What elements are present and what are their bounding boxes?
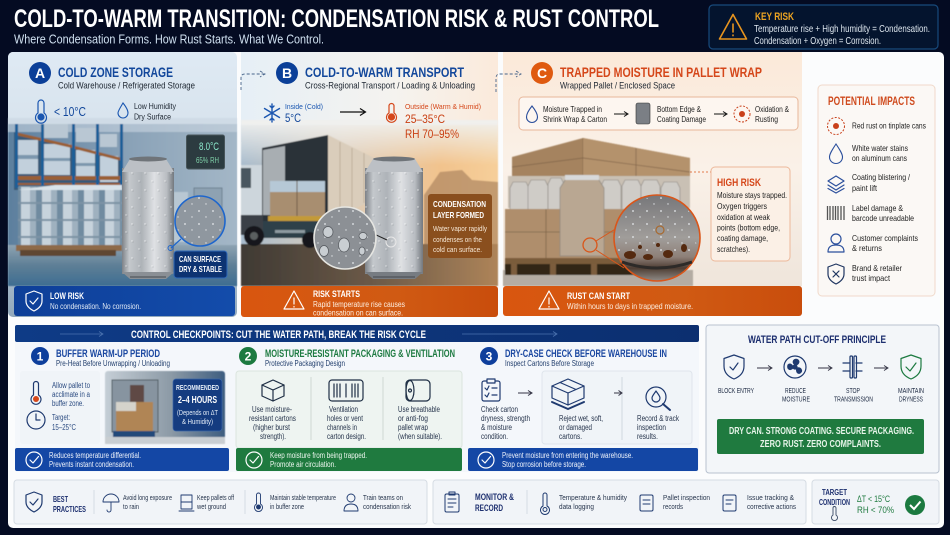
card 2: moisture-resistant packaging: MOISTURE-RESISTANT PACKAGING & VENTILATION bbox=[265, 348, 455, 360]
strip: monitor and record: MONITOR & bbox=[475, 492, 514, 502]
banner: low risk: No condensation. No corrosion. bbox=[50, 302, 141, 311]
result bar 1: Prevents instant condensation. bbox=[49, 460, 134, 469]
callout: condensation layer formed: CONDENSATION bbox=[433, 199, 486, 209]
impact: label damage bbox=[828, 203, 914, 223]
strip: best practices: to rain bbox=[123, 502, 139, 511]
strip: target condition: TARGET bbox=[822, 488, 847, 497]
panel: water path cut-off principle: BLOCK ENTRY bbox=[718, 386, 754, 395]
icon: clipboard bbox=[445, 492, 459, 512]
panel: C trapped moisture bbox=[496, 52, 802, 316]
label: can surface dry and stable: DRY & STABLE bbox=[179, 264, 222, 274]
stat: low humidity bbox=[118, 102, 176, 122]
callout: condensation layer formed: Water vapor rapidly bbox=[433, 224, 487, 233]
banner: rust can start: Within hours to days in trapped moisture. bbox=[567, 302, 693, 311]
truck scene bbox=[241, 120, 498, 286]
magnifier: droplets bbox=[314, 207, 376, 269]
icon: snowflake bbox=[264, 104, 280, 122]
strip: target condition bbox=[812, 480, 939, 524]
stat: inside cold bbox=[264, 102, 323, 125]
result bar 1: Reduces temperature differential. bbox=[49, 451, 141, 460]
strip: target condition: CONDITION bbox=[819, 498, 850, 507]
banner: low risk bbox=[14, 286, 235, 316]
card 1: buffer warm-up: BUFFER WARM-UP PERIOD bbox=[56, 348, 160, 360]
card 2: moisture-resistant packaging bbox=[236, 347, 462, 471]
pallet photo bbox=[503, 138, 693, 286]
callout: high risk bbox=[690, 167, 790, 261]
card 1: buffer warm-up: 15–25°C bbox=[52, 423, 76, 432]
callout: high risk: scratches). bbox=[717, 244, 750, 254]
panel: water path cut-off principle: REDUCE bbox=[785, 386, 806, 395]
card 2: moisture-resistant packaging: holes or vent bbox=[327, 414, 364, 423]
icon: shield bbox=[26, 492, 42, 512]
icon: umbrella bbox=[103, 494, 119, 512]
strip: monitor and record: RECORD bbox=[475, 503, 503, 513]
icon: drop bbox=[526, 106, 538, 122]
icon: thermometer bbox=[31, 382, 41, 404]
warehouse scene bbox=[8, 118, 237, 286]
process strip: moisture to rust: Coating Damage bbox=[657, 115, 706, 124]
banner: rust can start bbox=[503, 286, 802, 316]
icon: magnifier with drop bbox=[646, 387, 670, 410]
icon: warning triangle bbox=[720, 14, 746, 39]
strip: monitor and record: Pallet inspection bbox=[663, 493, 710, 502]
card 3: dry-case check: cartons. bbox=[559, 432, 582, 441]
stat: low humidity: Dry Surface bbox=[134, 112, 171, 122]
card 2: moisture-resistant packaging: 2 bbox=[245, 350, 252, 364]
strip: best practices bbox=[14, 480, 427, 524]
icon: rust spot bbox=[734, 106, 750, 122]
banner: rust can start: RUST CAN START bbox=[567, 291, 630, 302]
can bbox=[365, 156, 423, 279]
impact: white water stains bbox=[830, 143, 908, 164]
callout: condensation layer formed bbox=[428, 194, 492, 258]
callout: high risk: oxidation at weak bbox=[717, 212, 771, 222]
card 3: dry-case check: 3 bbox=[486, 350, 493, 364]
card 3: dry-case check: & moisture bbox=[481, 423, 512, 432]
card 2: moisture-resistant packaging: carton design. bbox=[327, 432, 366, 441]
strip: monitor and record: corrective actions bbox=[747, 502, 796, 511]
card 1: buffer warm-up: Allow pallet to bbox=[52, 381, 91, 390]
card 1: buffer warm-up: Target: bbox=[52, 413, 70, 422]
strip: best practices: Avoid long exposure bbox=[123, 493, 172, 502]
strip: best practices: Maintain stable temperature bbox=[270, 493, 336, 502]
card 2: moisture-resistant packaging: Use moisture- bbox=[252, 405, 292, 414]
result bar 2: Keep moisture from being trapped. bbox=[270, 451, 367, 460]
panel: water path cut-off principle: MAINTAIN bbox=[898, 386, 924, 395]
magnifier: rust bbox=[614, 195, 700, 281]
strip: best practices: wet ground bbox=[196, 502, 226, 511]
icon: humidity drop bbox=[118, 103, 128, 118]
impact: coating blistering: paint lift bbox=[852, 183, 878, 193]
banner: risk starts bbox=[241, 286, 498, 318]
panel: water path cut-off principle: TRANSMISSION bbox=[834, 394, 873, 404]
panel: water path cut-off principle bbox=[706, 325, 939, 473]
card 3: dry-case check: Inspect Cartons Before Storage bbox=[505, 359, 594, 368]
panel: B cold to warm transport bbox=[241, 52, 498, 318]
callout: key risk: KEY RISK bbox=[755, 11, 794, 23]
heading B bbox=[276, 62, 475, 92]
heading B: Cross-Regional Transport / Loading & Unloading bbox=[305, 80, 475, 92]
process strip: moisture to rust: Shrink Wrap & Carton bbox=[543, 115, 607, 124]
arrow: A to B bbox=[241, 71, 265, 90]
icon: wrap roll bbox=[406, 380, 430, 401]
heading B: COLD-TO-WARM TRANSPORT bbox=[305, 64, 464, 80]
icon: block entry shield bbox=[724, 355, 744, 379]
slogan box: ZERO RUST. ZERO COMPLAINTS. bbox=[760, 439, 881, 450]
card 2: moisture-resistant packaging: (when suitable). bbox=[398, 432, 442, 441]
stat: outside warm and humid: RH 70–95% bbox=[405, 127, 459, 141]
icon: issue tracking bbox=[723, 495, 736, 511]
icon: small can bbox=[636, 103, 650, 124]
card 2: moisture-resistant packaging: pallet wrap bbox=[398, 423, 429, 432]
card 3: dry-case check: Reject wet, soft, bbox=[559, 414, 603, 423]
temperature display bbox=[186, 135, 224, 169]
strip: best practices: Keep pallets off bbox=[197, 493, 234, 502]
magnifier: can surface bbox=[168, 196, 225, 250]
panel: control checkpoints: CONTROL CHECKPOINTS: CUT THE WATER PATH, BREAK THE RISK CYCLE bbox=[131, 329, 426, 341]
heading A bbox=[29, 62, 195, 92]
stat: inside cold: 5°C bbox=[285, 111, 301, 125]
impact: trust: trust impact bbox=[852, 273, 891, 283]
heading A: Cold Warehouse / Refrigerated Storage bbox=[58, 80, 195, 92]
result bar 3: Stop corrosion before storage. bbox=[502, 460, 586, 469]
subtitle: Where Condensation Forms. How Rust Starts. What We Control. bbox=[14, 32, 324, 46]
icon: warning bbox=[284, 291, 304, 309]
icon: shield bbox=[26, 291, 42, 311]
icon: green check bbox=[905, 495, 925, 515]
arrow: B to C bbox=[496, 71, 521, 92]
card 3: dry-case check: DRY-CASE CHECK BEFORE WAREHOUSE IN bbox=[505, 348, 667, 360]
stat: temperature below 10C: < 10°C bbox=[54, 104, 86, 119]
card 1: buffer warm-up: Pre-Heat Before Unwrapping / Unloading bbox=[56, 359, 170, 368]
callout: high risk: points (bottom edge, bbox=[717, 222, 780, 232]
process strip: moisture to rust bbox=[519, 97, 798, 130]
banner: low risk: LOW RISK bbox=[50, 291, 84, 302]
icon: stop transmission bbox=[843, 356, 862, 378]
banner: risk starts: Rapid temperature rise causes bbox=[313, 300, 405, 309]
callout: condensation layer formed: LAYER FORMED bbox=[433, 210, 484, 220]
icon: carton bbox=[262, 380, 284, 401]
icon: trainer bbox=[344, 494, 358, 511]
result bar 3: Prevent moisture from entering the warehouse. bbox=[502, 451, 633, 460]
can bbox=[122, 156, 174, 279]
strip: best practices: PRACTICES bbox=[53, 504, 86, 514]
card 3: dry-case check: Check carton bbox=[481, 405, 518, 414]
arrow: inside to outside bbox=[340, 108, 366, 116]
card 2: moisture-resistant packaging: (higher burst bbox=[253, 423, 291, 432]
process strip: moisture to rust: Rusting bbox=[755, 115, 778, 124]
stat: outside warm and humid: 25–35°C bbox=[405, 112, 445, 126]
result bar 2 bbox=[236, 448, 462, 471]
result bar 3 bbox=[468, 448, 698, 471]
impact: trust: Brand & retailer bbox=[852, 263, 902, 273]
heading C bbox=[531, 62, 762, 92]
strip: target condition: ΔT < 15°C bbox=[857, 494, 890, 505]
impact: coating blistering: Coating blistering / bbox=[852, 172, 911, 182]
heading A: A bbox=[35, 65, 45, 81]
panel: potential impacts: POTENTIAL IMPACTS bbox=[828, 96, 915, 108]
flow arrows bbox=[757, 366, 888, 370]
impact: label damage: Label damage & bbox=[852, 203, 903, 213]
strip: monitor and record: data logging bbox=[559, 502, 594, 511]
callout: recommended 2-4 hours bbox=[173, 379, 222, 431]
card 2: moisture-resistant packaging: resistant cartons bbox=[249, 414, 296, 423]
callout: key risk: Condensation + Oxygen = Corrosion. bbox=[754, 35, 881, 47]
impact: customer complaints: & returns bbox=[852, 243, 882, 253]
buffer zone photo bbox=[105, 371, 225, 444]
heading C: TRAPPED MOISTURE IN PALLET WRAP bbox=[560, 64, 762, 80]
callout: recommended 2-4 hours: 2–4 HOURS bbox=[178, 394, 217, 406]
card 3: dry-case check: Record & track bbox=[637, 414, 679, 423]
result bar 2: Promote air circulation. bbox=[270, 460, 336, 469]
result bar 1 bbox=[15, 448, 229, 471]
process strip: moisture to rust: Oxidation & bbox=[755, 105, 790, 114]
icon: warning bbox=[539, 291, 559, 309]
strip: monitor and record: Temperature & humidity bbox=[559, 493, 627, 502]
magnified pointer bbox=[583, 228, 624, 268]
icon: thermometer bbox=[540, 493, 550, 515]
temperature display: 65% RH bbox=[196, 156, 219, 165]
strip: target condition: RH < 70% bbox=[857, 505, 894, 516]
icon: clock bbox=[27, 411, 45, 429]
card 1: buffer warm-up: 1 bbox=[37, 350, 44, 364]
impact: trust bbox=[828, 263, 902, 284]
icon: thermometer bbox=[35, 100, 46, 123]
icon: thermometer bbox=[254, 493, 262, 511]
strip: monitor and record bbox=[433, 480, 806, 524]
process strip: moisture to rust: Moisture Trapped in bbox=[543, 105, 602, 114]
process strip: moisture to rust: Bottom Edge & bbox=[657, 105, 702, 114]
temperature display: 8.0°C bbox=[199, 141, 219, 153]
label: can surface dry and stable bbox=[174, 251, 227, 278]
heading B: B bbox=[282, 65, 292, 81]
banner: risk starts: condensation on can surface. bbox=[313, 308, 403, 318]
panel: water path cut-off principle: WATER PATH CUT-OFF PRINCIPLE bbox=[748, 334, 886, 346]
banner: risk starts: RISK STARTS bbox=[313, 289, 360, 300]
slogan box bbox=[717, 419, 924, 454]
card 3: dry-case check: or damaged bbox=[559, 423, 592, 432]
card 2: moisture-resistant packaging: strength). bbox=[260, 432, 286, 441]
card 3: dry-case check: inspection bbox=[637, 423, 666, 432]
impact: customer complaints bbox=[828, 233, 918, 253]
strip: best practices: BEST bbox=[53, 494, 69, 504]
icon: pallet records bbox=[640, 495, 653, 511]
icon: fan bbox=[784, 356, 806, 378]
panel: potential impacts bbox=[818, 85, 935, 296]
card 2: moisture-resistant packaging: Ventilation bbox=[329, 405, 358, 414]
callout: high risk: coating damage, bbox=[717, 233, 768, 243]
icon: thermometer bbox=[832, 507, 838, 521]
icon: clipboard bbox=[482, 379, 500, 401]
panel: water path cut-off principle: MOISTURE bbox=[782, 394, 810, 404]
strip: best practices: condensation risk bbox=[363, 502, 411, 511]
strip: best practices: Train teams on bbox=[363, 493, 403, 502]
impact: red rust: Red rust on tinplate cans bbox=[852, 120, 926, 130]
card 2: moisture-resistant packaging: Use breathable bbox=[398, 405, 440, 414]
callout: high risk: HIGH RISK bbox=[717, 177, 761, 189]
callout: high risk: Moisture stays trapped. bbox=[717, 190, 787, 200]
panel: control checkpoints bbox=[15, 325, 699, 472]
impact: coating blistering bbox=[828, 172, 911, 193]
icon: cartons on pallet bbox=[552, 379, 584, 409]
card 3: dry-case check: dryness, strength bbox=[481, 414, 530, 423]
card 1: buffer warm-up: acclimate in a bbox=[52, 390, 91, 399]
strip: monitor and record: records bbox=[663, 502, 683, 511]
icon: maintain dryness shield bbox=[901, 355, 921, 379]
card 2: moisture-resistant packaging: Protective Packaging Design bbox=[265, 359, 345, 368]
icon: thermometer warm bbox=[387, 104, 396, 122]
callout: recommended 2-4 hours: RECOMMENDED bbox=[176, 383, 219, 392]
card 3: dry-case check bbox=[468, 347, 698, 471]
card 1: buffer warm-up bbox=[15, 347, 229, 471]
icon: vent carton bbox=[329, 380, 363, 401]
title: COLD-TO-WARM TRANSITION: CONDENSATION RISK & RUST CONTROL bbox=[14, 5, 659, 33]
callout: high risk: Oxygen triggers bbox=[717, 201, 767, 211]
stat: temperature below 10C bbox=[35, 100, 86, 123]
impact: white water stains: White water stains bbox=[852, 143, 908, 153]
icon: pallet bbox=[179, 495, 194, 511]
callout: recommended 2-4 hours: (Depends on ΔT bbox=[177, 408, 218, 417]
card 2: moisture-resistant packaging: channels in bbox=[327, 423, 357, 432]
callout: condensation layer formed: condenses on the bbox=[433, 235, 482, 244]
card 3: dry-case check: condition. bbox=[481, 432, 508, 441]
card 2: moisture-resistant packaging: or anti-fog bbox=[398, 414, 428, 423]
panel: water path cut-off principle: STOP bbox=[846, 386, 860, 395]
callout: condensation layer formed: cold can surface. bbox=[433, 245, 482, 254]
callout: key risk bbox=[709, 5, 938, 49]
strip: best practices: in buffer zone bbox=[270, 502, 304, 511]
stat: outside warm and humid bbox=[387, 102, 481, 141]
impact: label damage: barcode unreadable bbox=[852, 213, 914, 223]
heading C: Wrapped Pallet / Enclosed Space bbox=[560, 80, 675, 92]
card 3: dry-case check: results. bbox=[637, 432, 658, 441]
heading C: C bbox=[537, 65, 547, 81]
panel: A cold zone storage bbox=[8, 52, 237, 317]
impact: white water stains: on aluminum cans bbox=[852, 153, 907, 163]
stat: outside warm and humid: Outside (Warm & Humid) bbox=[405, 102, 481, 111]
stat: low humidity: Low Humidity bbox=[134, 102, 176, 111]
label: can surface dry and stable: CAN SURFACE bbox=[179, 254, 221, 264]
stat: inside cold: Inside (Cold) bbox=[285, 102, 323, 111]
panel: water path cut-off principle: DRYNESS bbox=[899, 394, 923, 404]
heading A: COLD ZONE STORAGE bbox=[58, 64, 173, 80]
callout: recommended 2-4 hours: & Humidity) bbox=[182, 417, 213, 426]
card 1: buffer warm-up: buffer zone. bbox=[52, 399, 84, 408]
impact: customer complaints: Customer complaints bbox=[852, 233, 918, 243]
strip: monitor and record: Issue tracking & bbox=[747, 493, 794, 502]
impact: red rust bbox=[828, 118, 926, 134]
